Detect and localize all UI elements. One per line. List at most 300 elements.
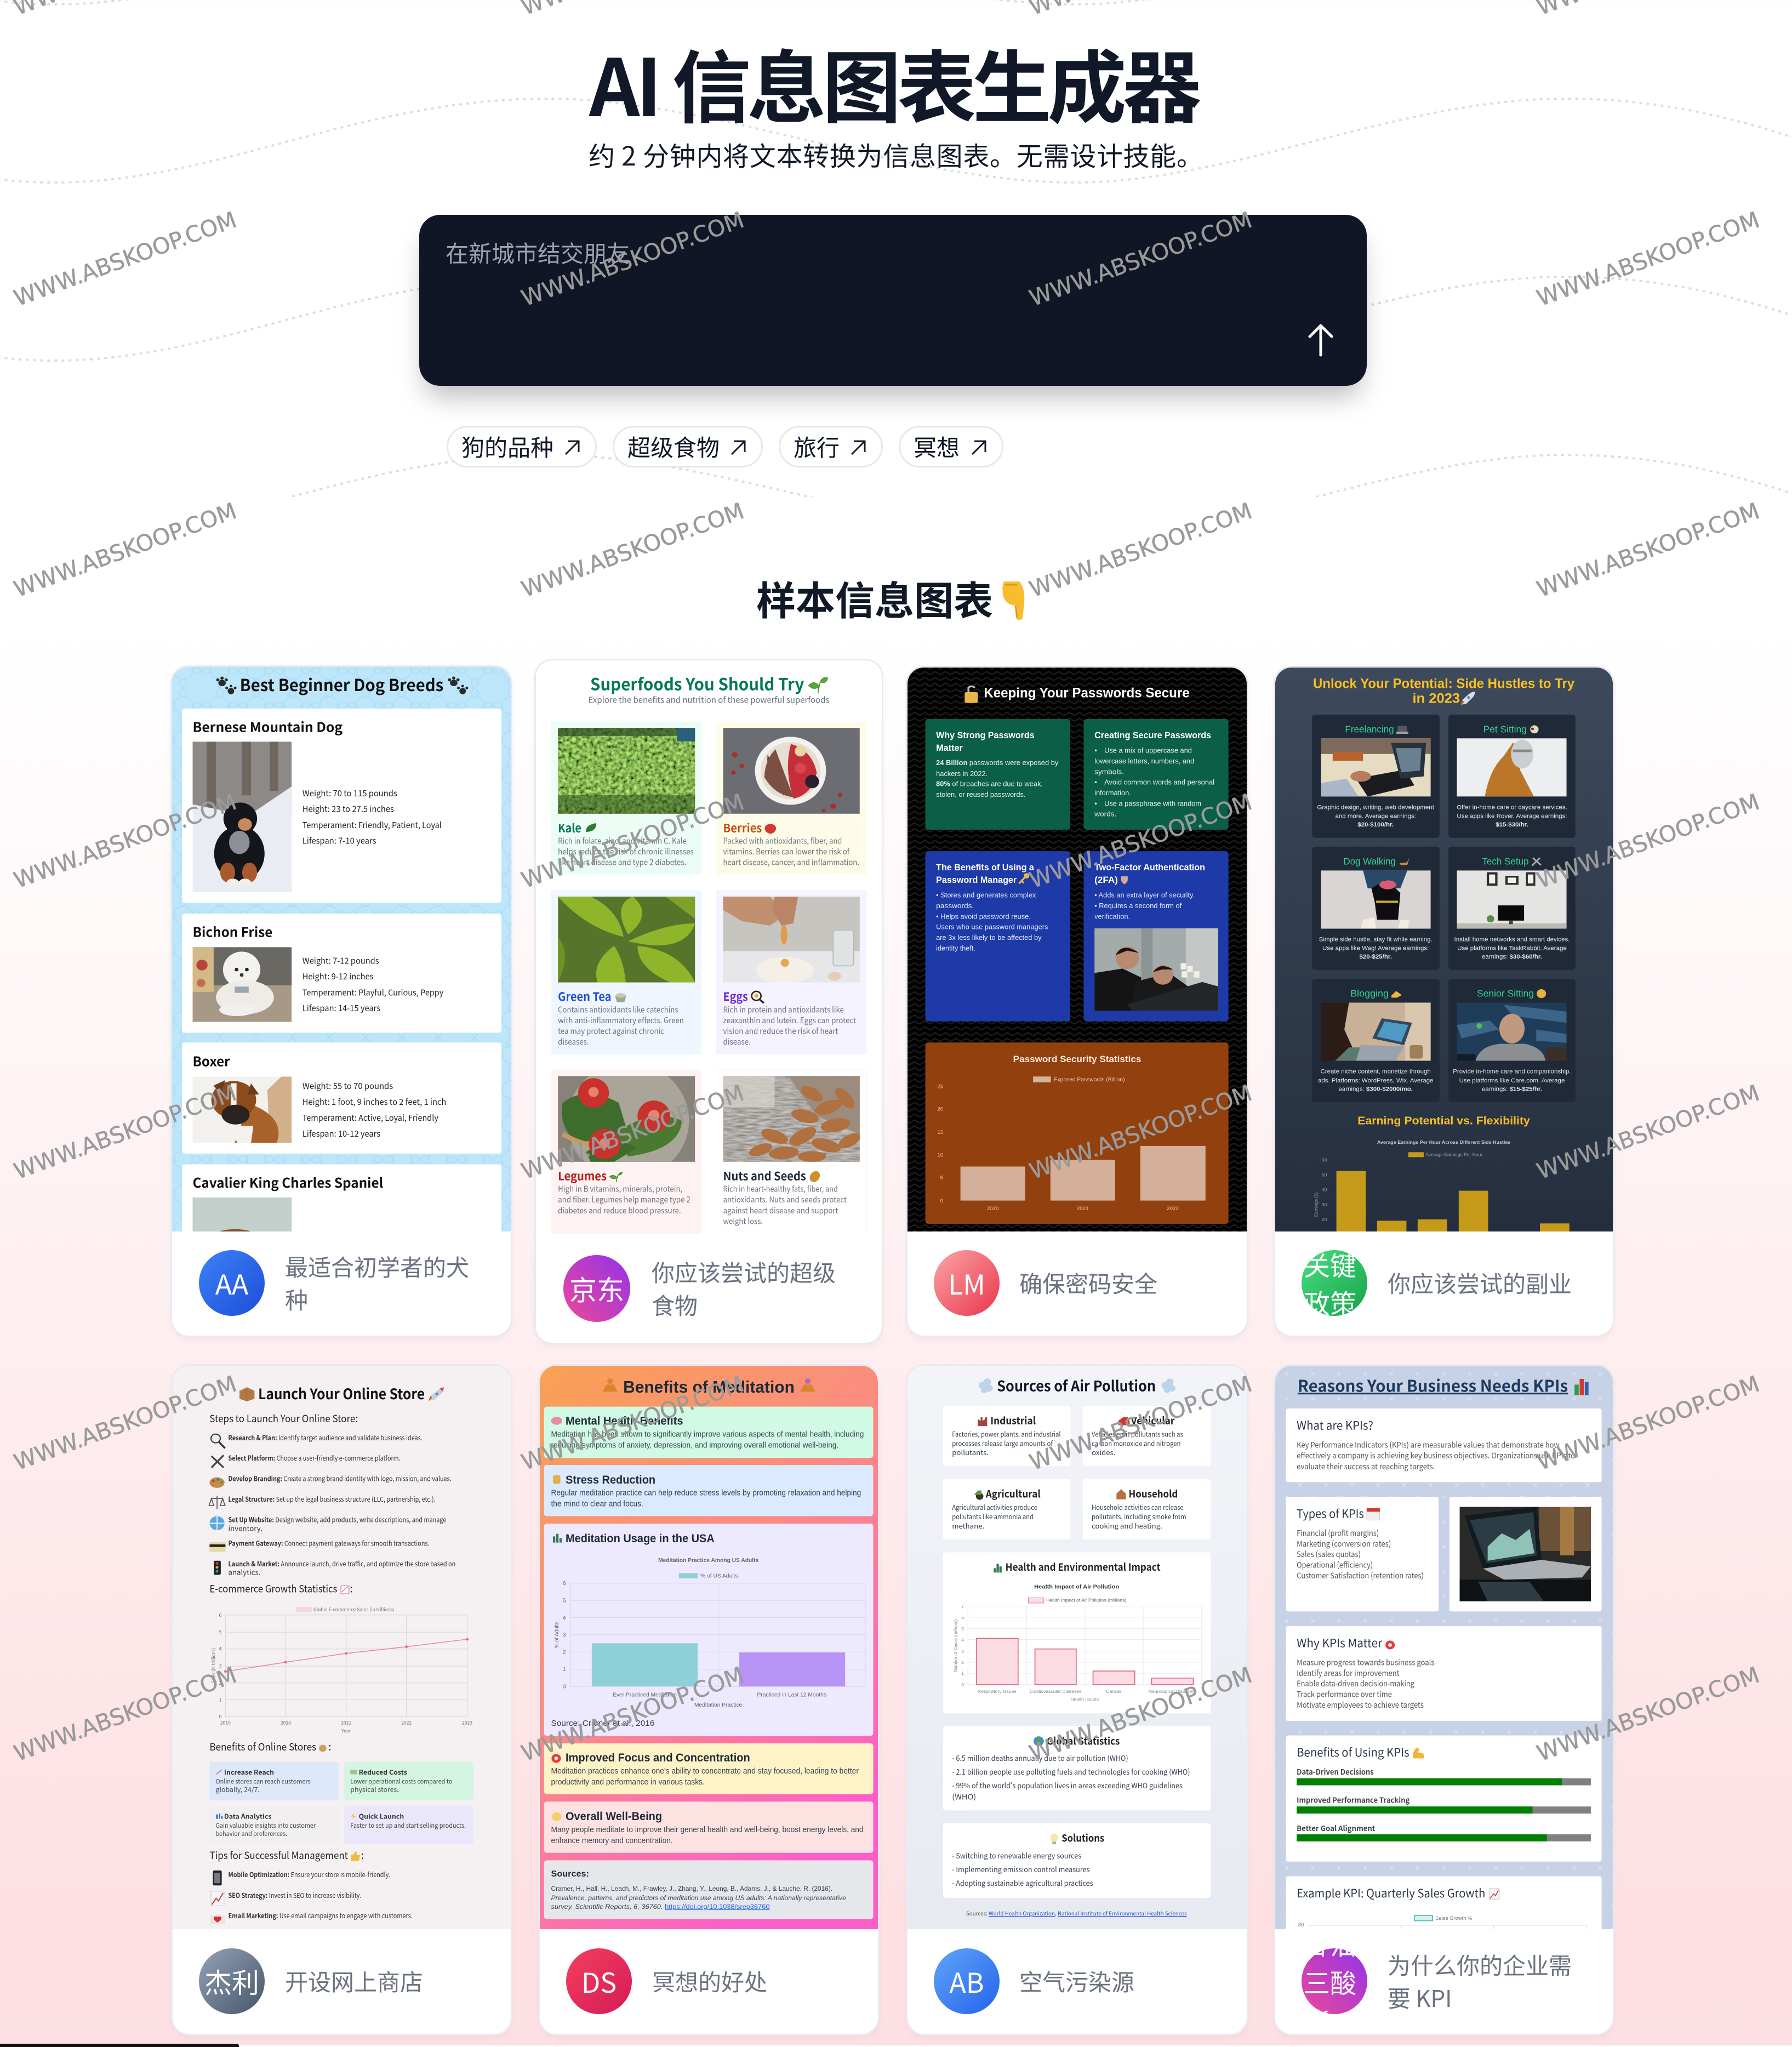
panel: stress reduction: the mind to clear and focus. xyxy=(551,1499,643,1509)
breed panel: Bernese Mountain Dog xyxy=(182,709,501,903)
panel: why strong passwords matter: hackers in 2022. xyxy=(936,769,988,778)
panel: types of KPIs xyxy=(1286,1497,1439,1611)
chart panel: meditation usage xyxy=(544,1524,873,1736)
watermarks: WWW.ABSKOOP.COM xyxy=(10,1080,240,1184)
chart: earning potential vs flexibility xyxy=(1313,1115,1570,1231)
avatar: DS: DS xyxy=(581,1961,617,2000)
avatar: triglyceride: 三酸 xyxy=(1304,1962,1356,2000)
food card: Eggs: zeaxanthin and lutein. Eggs can protect xyxy=(723,1014,856,1026)
benefits of online stores: : xyxy=(328,1740,332,1754)
caption: 空气污染源 xyxy=(1019,1964,1134,1997)
card: air pollution xyxy=(908,1366,1247,2034)
section heading: 样本信息图表 xyxy=(756,569,993,626)
benefits of online stores xyxy=(209,1740,473,1844)
prompt input panel xyxy=(419,215,1367,386)
source: Vehicular: oxides. xyxy=(1092,1447,1115,1457)
food card: Berries xyxy=(716,722,867,875)
card footer: dog breeds xyxy=(199,1250,469,1316)
watermarks: WWW.ABSKOOP.COM xyxy=(1533,1080,1763,1184)
hustle: Tech Setup: Tech Setup xyxy=(1482,856,1529,867)
heading: Sources of Air Pollution xyxy=(997,1374,1156,1395)
chart panel: meditation usage: Meditation Practice Among US Adults xyxy=(658,1558,759,1564)
avatar: 京东: 京东 xyxy=(569,1268,624,1308)
chart: health and environmental impact: Health Issues xyxy=(1070,1697,1099,1702)
panel: benefits progress bars: Data-Driven Decisions xyxy=(1297,1767,1374,1777)
hustle: Senior Sitting xyxy=(1448,979,1576,1102)
watermarks: WWW.ABSKOOP.COM xyxy=(1026,1080,1255,1184)
chip: dog breeds: 狗的品种 xyxy=(461,430,553,463)
panel: types of KPIs: Sales (sales quotas) xyxy=(1297,1549,1361,1560)
food card: Eggs: Rich in protein and antioxidants like xyxy=(723,1004,844,1015)
chart: e-commerce growth: Sales (in trillions) xyxy=(210,1648,217,1684)
food card: Kale: like heart disease and type 2 diabetes. xyxy=(558,857,686,868)
chart panel: meditation usage: 6 xyxy=(563,1581,566,1587)
hustle: Freelancing: and more. Average earnings: xyxy=(1335,813,1416,820)
placeholder text: 在新城市结交朋友 xyxy=(446,236,630,269)
chip: superfoods xyxy=(613,426,763,467)
chart: e-commerce growth: 3 xyxy=(219,1663,222,1669)
panel: stress reduction xyxy=(544,1465,873,1516)
chart: health and environmental impact: 6 xyxy=(961,1615,964,1620)
food card: Green Tea: Contains antioxidants like catechins xyxy=(558,1004,678,1015)
chart: health and environmental impact: Health Impact of Air Pollution xyxy=(1034,1584,1119,1590)
watermarks: WWW.ABSKOOP.COM xyxy=(518,1662,747,1766)
hustle: Freelancing: Freelancing xyxy=(1345,724,1394,734)
source: Household: pollutants, including smoke from xyxy=(1092,1511,1186,1521)
hustle: Dog Walking xyxy=(1312,847,1440,970)
benefits of online stores: Gain valuable insights into customer xyxy=(216,1821,316,1830)
chart: health and environmental impact: Health Impact of Air Pollution (millions) xyxy=(1046,1598,1127,1603)
global statistics: (WHO) xyxy=(952,1792,976,1802)
food card: Legumes: and fiber. Legumes help manage type 2 xyxy=(558,1194,690,1205)
breed panel: Cavalier King Charles Spaniel: Cavalier King Charles Spaniel xyxy=(193,1173,383,1192)
panel: improved focus: Improved Focus and Concentration xyxy=(566,1751,750,1764)
chart: health and environmental impact: 2 xyxy=(961,1660,964,1665)
chart panel: meditation usage: % of Adults xyxy=(554,1622,560,1648)
chart: earning potential vs flexibility: 30 xyxy=(1322,1202,1327,1207)
avatar: LM: LM xyxy=(948,1263,985,1303)
panel: why KPIs matter: Enable data-driven decision-making xyxy=(1297,1678,1414,1689)
watermarks: WWW.ABSKOOP.COM xyxy=(1026,789,1255,893)
panel: overall well-being: enhance memory and concentration. xyxy=(551,1836,673,1845)
food card: Green Tea: Green Tea xyxy=(558,988,611,1005)
food card: Nuts and Seeds: weight loss. xyxy=(723,1216,763,1227)
watermarks: WWW.ABSKOOP.COM xyxy=(518,1371,747,1475)
watermarks: WWW.ABSKOOP.COM xyxy=(1026,207,1255,311)
caption: 要 KPI xyxy=(1388,1981,1452,2014)
global statistics: Global Statistics xyxy=(1047,1733,1120,1748)
food card: Berries: Berries xyxy=(723,819,762,836)
chart: password security statistics: 15 xyxy=(937,1130,943,1136)
avatar: LM xyxy=(934,1250,1000,1316)
source: Industrial xyxy=(952,1413,1061,1457)
chart: earning potential vs flexibility: 40 xyxy=(1322,1187,1327,1192)
heading: Benefits of Meditation xyxy=(623,1377,795,1396)
avatar: DS xyxy=(566,1948,632,2014)
chart: health and environmental impact: 3 xyxy=(961,1649,964,1654)
hustle: Tech Setup: earnings: $30-$60/hr. xyxy=(1482,954,1542,960)
chart panel: meditation usage: 4 xyxy=(563,1615,566,1621)
tips for management: : xyxy=(361,1848,364,1862)
panel: improved focus: productivity and performance in various tasks. xyxy=(551,1777,705,1787)
chart: health and environmental impact: Number of Cases (millions) xyxy=(952,1619,958,1673)
caption xyxy=(285,1250,469,1316)
panel: types of KPIs: Marketing (conversion rates) xyxy=(1297,1538,1391,1549)
benefits of online stores: Increase Reach xyxy=(224,1768,274,1777)
watermarks: WWW.ABSKOOP.COM xyxy=(1533,1662,1763,1766)
chart panel: meditation usage: Practiced in Last 12 Months xyxy=(757,1692,826,1698)
panel: creating secure passwords: words. xyxy=(1094,810,1116,818)
chart: password security statistics: 2020 xyxy=(987,1206,999,1212)
caption xyxy=(1388,1948,1572,2014)
chart: password security statistics: Password Security Statistics xyxy=(1013,1054,1141,1064)
benefits of online stores: Reduced Costs xyxy=(359,1768,407,1777)
chart: health and environmental impact: Health and Environmental Impact xyxy=(1006,1559,1161,1574)
chart: password security statistics: 2021 xyxy=(1077,1206,1089,1212)
breed panel: Bernese Mountain Dog: Height: 23 to 27.5 inches xyxy=(303,803,394,814)
panel: password manager benefits: • Helps avoid password reuse. xyxy=(936,913,1031,920)
panel: example KPI chart: Example KPI: Quarterly Sales Growth xyxy=(1297,1885,1485,1901)
avatar: 杰利 xyxy=(199,1948,265,2014)
sources footer: Sources: World Health Organization, National Institute of Environmental Health Sciences xyxy=(966,1909,1187,1917)
chart: e-commerce growth: 5 xyxy=(219,1629,222,1635)
hustle: Dog Walking: $20-$25/hr. xyxy=(1359,954,1392,960)
chart: earning potential vs flexibility: 50 xyxy=(1322,1172,1327,1177)
source: Agricultural: pollutants like ammonia and xyxy=(952,1511,1034,1521)
food card: Kale: Kale xyxy=(558,819,581,836)
caption: 最适合初学者的犬 xyxy=(285,1250,469,1283)
food card: Kale: Rich in folate, zinc, and vitamin C. Kale xyxy=(558,835,687,846)
card: meditation xyxy=(540,1366,878,2034)
panel: improved focus xyxy=(544,1743,873,1794)
benefits of online stores: Data Analytics xyxy=(224,1812,272,1821)
benefits of online stores: physical stores. xyxy=(350,1785,399,1794)
panel: two-factor authentication: verification. xyxy=(1094,913,1130,920)
panel: creating secure passwords: information. xyxy=(1094,789,1131,797)
hustle: Dog Walking: Simple side hustle, stay fit while earning. xyxy=(1319,937,1433,943)
watermarks: WWW.ABSKOOP.COM xyxy=(10,1371,240,1475)
chart: health and environmental impact xyxy=(952,1559,1202,1702)
panel: why KPIs matter: Why KPIs Matter xyxy=(1297,1634,1383,1651)
panel: what are KPIs: evaluate their success at reaching targets. xyxy=(1297,1461,1435,1472)
decorative dotted waves xyxy=(0,0,1792,497)
breed panel: Bernese Mountain Dog: Temperament: Friendly, Patient, Loyal xyxy=(303,819,442,831)
panel: two-factor authentication: (2FA) xyxy=(1094,875,1118,885)
panel: creating secure passwords: • xyxy=(1094,746,1097,754)
chart: e-commerce growth: 2 xyxy=(219,1680,222,1686)
panel: why KPIs matter: Identify areas for improvement xyxy=(1297,1667,1400,1679)
panel: why KPIs matter: Measure progress towards business goals xyxy=(1297,1657,1435,1668)
chart panel: meditation usage: Meditation Usage in the USA xyxy=(566,1531,715,1545)
panel: dashboard photo xyxy=(1449,1497,1602,1611)
chart: health and environmental impact: Neurological Disorders xyxy=(1149,1689,1196,1694)
food card: Nuts and Seeds: against heart disease and support xyxy=(723,1205,838,1216)
panel: password manager benefits: are 3x less likely to be affected by xyxy=(936,933,1042,942)
panel: why strong passwords matter: stolen, or reused passwords. xyxy=(936,790,1025,799)
steps list xyxy=(209,1411,455,1577)
chart panel: meditation usage: Meditation Practice xyxy=(694,1702,743,1708)
breed panel: Boxer xyxy=(182,1042,501,1154)
hustle: Pet Sitting: $15-$30/hr. xyxy=(1496,822,1528,828)
hustle: Blogging: Create niche content, monetize through xyxy=(1321,1069,1431,1075)
panel: overall well-being: Overall Well-Being xyxy=(566,1810,662,1823)
caption: 为什么你的企业需 xyxy=(1388,1948,1572,1981)
food card: Berries: vitamins. Berries can lower the risk of xyxy=(723,846,850,857)
steps list: analytics. xyxy=(229,1567,260,1577)
food card: Eggs: Eggs xyxy=(723,988,748,1005)
chart: e-commerce growth xyxy=(209,1581,473,1734)
hustle: Pet Sitting: Pet Sitting xyxy=(1483,724,1527,734)
watermarks: WWW.ABSKOOP.COM xyxy=(10,498,240,602)
caption: 你应该尝试的超级 xyxy=(652,1255,836,1288)
chart: e-commerce growth: 1 xyxy=(219,1697,222,1703)
panel: two-factor authentication: Two-Factor Authentication xyxy=(1094,863,1205,873)
avatar: 京东 xyxy=(563,1255,630,1322)
chart: password security statistics: 20 xyxy=(937,1107,943,1112)
panel: example KPI chart: 30 xyxy=(1298,1922,1304,1928)
chart: health and environmental impact: 0 xyxy=(961,1682,964,1687)
benefits of online stores: globally, 24/7. xyxy=(216,1785,260,1794)
tips for management: Mobile Optimization: Ensure your store is mobile-friendly. xyxy=(229,1869,390,1879)
solutions: - Implementing emission control measures xyxy=(952,1864,1090,1875)
breed panel: Cavalier King Charles Spaniel xyxy=(182,1164,501,1240)
hustle: Dog Walking: Use apps like Wag! Average earnings: xyxy=(1322,945,1429,952)
chart: health and environmental impact: Cancer xyxy=(1106,1689,1121,1694)
avatar: 杰利: 杰利 xyxy=(204,1961,259,2000)
chip: travel: 旅行 xyxy=(794,430,840,463)
panel: mental health benefits: Mental Health Benefits xyxy=(566,1414,683,1428)
avatar: policy xyxy=(1302,1250,1367,1316)
breed panel: Bichon Frise xyxy=(182,914,501,1033)
chart: health and environmental impact: 7 xyxy=(961,1604,964,1609)
panel: what are KPIs: What are KPIs? xyxy=(1297,1417,1373,1433)
benefits of online stores: Lower operational costs compared to xyxy=(350,1777,452,1786)
chip: dog breeds xyxy=(447,426,597,467)
breed panel: Boxer: Temperament: Active, Loyal, Friendly xyxy=(303,1112,438,1124)
chart: password security statistics: Exposed Passwords (Billion) xyxy=(1054,1077,1125,1083)
panel: password manager benefits: Password Manager xyxy=(936,875,1017,885)
solutions xyxy=(952,1830,1104,1889)
chart: e-commerce growth: Year xyxy=(341,1727,351,1734)
infographic thumbnail: air pollution xyxy=(908,1365,1247,1929)
panel: why KPIs matter xyxy=(1286,1626,1602,1721)
chart panel: meditation usage: 1 xyxy=(563,1667,566,1673)
watermarks: WWW.ABSKOOP.COM xyxy=(518,207,747,311)
watermarks: WWW.ABSKOOP.COM xyxy=(10,1662,240,1766)
benefits of online stores: Online stores can reach customers xyxy=(216,1777,311,1786)
panel: types of KPIs: Financial (profit margins) xyxy=(1297,1527,1379,1538)
benefits of online stores: Faster to set up and start selling products. xyxy=(350,1821,466,1830)
steps list: Set Up Website: Design website, add products, write descriptions, and manage xyxy=(229,1514,446,1525)
source: Industrial: pollutants. xyxy=(952,1447,989,1457)
global statistics: - 2.1 billion people use polluting fuels and technologies for cooking (WHO) xyxy=(952,1767,1190,1777)
panel: password manager benefits: Users who use password managers xyxy=(936,923,1048,931)
source: Agricultural: Agricultural activities produce xyxy=(952,1502,1037,1512)
breed panel: Bichon Frise: Temperament: Playful, Curious, Peppy xyxy=(303,987,443,998)
chart: earning potential vs flexibility: Earnings ($) xyxy=(1313,1193,1319,1217)
chart: e-commerce growth: 6 xyxy=(219,1612,222,1618)
hustle: Blogging: Blogging xyxy=(1350,988,1389,999)
tips for management: SEO Strategy: Invest in SEO to increase visibility. xyxy=(229,1890,361,1900)
source: Industrial: Factories, power plants, and industrial xyxy=(952,1429,1061,1439)
panel: types of KPIs: Operational (efficiency) xyxy=(1297,1559,1373,1570)
panel: creating secure passwords: Creating Secure Passwords xyxy=(1094,730,1211,740)
chart: e-commerce growth: 2022 xyxy=(401,1720,412,1726)
chart panel: meditation usage: Ever Practiced Meditation xyxy=(613,1692,677,1698)
food card: Nuts and Seeds: antioxidants. Nuts and seeds protect xyxy=(723,1194,847,1205)
chart: password security statistics: 5 xyxy=(940,1175,943,1181)
chart: earning potential vs flexibility: 60 xyxy=(1322,1158,1327,1162)
subtitle: 约 2 分钟内将文本转换为信息图表。无需设计技能。 xyxy=(589,135,1203,173)
panel: why strong passwords matter: 80% of breaches are due to weak, xyxy=(936,780,1043,788)
solutions: Solutions xyxy=(1061,1830,1104,1845)
infographic thumbnail: meditation xyxy=(540,1365,878,1929)
panel: creating secure passwords: • xyxy=(1094,778,1097,786)
panel: password manager benefits: identity theft. xyxy=(936,944,975,952)
chart panel: meditation usage: 3 xyxy=(563,1632,566,1638)
source: Household: Household xyxy=(1129,1486,1178,1501)
card footer: air pollution xyxy=(908,1928,1247,2034)
solutions: - Adopting sustainable agricultural practices xyxy=(952,1878,1093,1889)
chart panel: meditation usage: 2 xyxy=(563,1650,566,1655)
panel: sources: survey. Scientific Reports, 6, 36760. https://doi.org/10.1038/srep36760 xyxy=(551,1903,770,1911)
panel: why strong passwords matter xyxy=(925,719,1070,830)
panel: two-factor authentication xyxy=(1083,851,1229,1022)
infographic thumbnail: dog breeds xyxy=(172,667,511,1231)
food card: Eggs: disease. xyxy=(723,1036,751,1047)
card: KPIs xyxy=(1275,1366,1613,2034)
steps list: Launch & Market: Announce launch, drive traffic, and optimize the store based on xyxy=(229,1559,455,1569)
global statistics: - 99% of the world's population lives in areas exceeding WHO guidelines xyxy=(952,1781,1183,1791)
heading: Launch Your Online Store xyxy=(258,1382,425,1404)
breed panel: Boxer: Boxer xyxy=(193,1051,230,1070)
watermarks: WWW.ABSKOOP.COM xyxy=(1533,789,1763,893)
heading: Best Beginner Dog Breeds xyxy=(240,672,443,696)
heading xyxy=(589,671,829,705)
source: Agricultural: Agricultural xyxy=(985,1486,1041,1501)
chart panel: meditation usage: Source: Cramer et al., 2016 xyxy=(551,1719,654,1728)
steps list: inventory. xyxy=(229,1523,262,1533)
chart: health and environmental impact: Respiratory Issues xyxy=(978,1689,1017,1694)
food card: Green Tea: tea may protect against chronic xyxy=(558,1025,664,1036)
steps list: Steps to Launch Your Online Store: xyxy=(209,1411,358,1426)
panel: sources xyxy=(544,1860,873,1919)
food card: Eggs xyxy=(716,890,867,1054)
title: AI 信息图表生成器 xyxy=(589,25,1198,139)
panel: creating secure passwords: Use a mix of uppercase and xyxy=(1104,746,1192,754)
watermarks: WWW.ABSKOOP.COM xyxy=(10,207,240,311)
chart: health and environmental impact: 1 xyxy=(961,1670,964,1676)
source: Vehicular xyxy=(1092,1413,1183,1457)
avatar: AA xyxy=(199,1250,265,1316)
watermarks: WWW.ABSKOOP.COM xyxy=(1533,1371,1763,1475)
chart panel: meditation usage: 5 xyxy=(563,1598,566,1604)
steps list: Payment Gateway: Connect payment gateways for smooth transactions. xyxy=(229,1538,430,1548)
food card: Nuts and Seeds: Nuts and Seeds xyxy=(723,1167,806,1184)
chart: e-commerce growth: E-commerce Growth Statistics xyxy=(209,1581,337,1595)
chart: e-commerce growth: : xyxy=(350,1581,353,1595)
icon: pointing down hand xyxy=(1002,581,1025,620)
card: passwords xyxy=(908,668,1247,1336)
panel: creating secure passwords xyxy=(1083,719,1229,830)
panel: benefits progress bars: Benefits of Using KPIs xyxy=(1297,1744,1409,1760)
chip: superfoods: 超级食物 xyxy=(627,430,720,463)
chart: e-commerce growth: 0 xyxy=(219,1713,222,1720)
food card: Green Tea: diseases. xyxy=(558,1036,589,1047)
heading: in 2023 xyxy=(1412,691,1460,706)
hustle: Dog Walking: Dog Walking xyxy=(1343,856,1396,867)
chart: e-commerce growth: Global E-commerce Sales (in trillions) xyxy=(313,1606,395,1612)
chart: health and environmental impact: 4 xyxy=(961,1637,964,1643)
card footer: passwords xyxy=(934,1250,1157,1316)
food card: Eggs: vision and reduce the risk of heart xyxy=(723,1025,838,1036)
panel: why KPIs matter: Track performance over time xyxy=(1297,1689,1392,1700)
breed panel: Bernese Mountain Dog: Weight: 70 to 115 pounds xyxy=(303,787,397,799)
avatar: AB: AB xyxy=(949,1961,984,2000)
steps list: Legal Structure: Set up the legal business structure (LLC, partnership, etc.). xyxy=(229,1493,436,1504)
panel: creating secure passwords: Avoid common words and personal xyxy=(1104,778,1214,786)
source: Vehicular: Vehicles emit pollutants such as xyxy=(1092,1429,1183,1439)
heading: Keeping Your Passwords Secure xyxy=(984,686,1190,701)
chart: e-commerce growth: 4 xyxy=(219,1645,222,1652)
hustle: Freelancing xyxy=(1312,715,1440,838)
chart panel: meditation usage: % of US Adults xyxy=(700,1573,738,1579)
caption: 冥想的好处 xyxy=(652,1964,767,1997)
panel: password manager benefits: The Benefits of Using a xyxy=(936,863,1035,873)
hustle: Tech Setup: Use platforms like TaskRabbit. Average xyxy=(1457,945,1567,952)
hustle: Pet Sitting xyxy=(1448,715,1576,838)
panel: why strong passwords matter: Why Strong Passwords xyxy=(936,730,1035,740)
food card: Green Tea: with anti-inflammatory effects. Green xyxy=(558,1014,684,1026)
panel: what are KPIs xyxy=(1286,1409,1602,1482)
food card: Berries: heart disease, cancer, and inflammation. xyxy=(723,857,859,868)
food card: Kale: helps reduce the risk of chronic illnesses xyxy=(558,846,694,857)
hustle: Senior Sitting: earnings: $15-$25/hr. xyxy=(1482,1086,1542,1092)
panel: why KPIs matter: Motivate employees to achieve targets xyxy=(1297,1699,1424,1710)
source: Agricultural: methane. xyxy=(952,1520,984,1531)
source: Household: Household activities can release xyxy=(1092,1502,1184,1512)
watermarks: WWW.ABSKOOP.COM xyxy=(1026,498,1255,602)
panel: benefits progress bars: Better Goal Alignment xyxy=(1297,1823,1375,1834)
caption: 你应该尝试的副业 xyxy=(1388,1266,1572,1299)
breed panel: Bichon Frise: Weight: 7-12 pounds xyxy=(303,955,379,966)
breed panel: Boxer: Weight: 55 to 70 pounds xyxy=(303,1080,393,1092)
panel: password manager benefits xyxy=(925,851,1070,1022)
steps list: Develop Branding: Create a strong brand identity with logo, mission, and values. xyxy=(229,1473,452,1484)
food card: Kale xyxy=(551,722,701,875)
hustle: Blogging: ads. Platforms: WordPress, Wix. Average xyxy=(1318,1077,1433,1084)
avatar: AA: AA xyxy=(215,1263,248,1303)
heading: Superfoods You Should Try xyxy=(590,671,804,695)
heading: Explore the benefits and nutrition of these powerful superfoods xyxy=(589,694,829,705)
chart: e-commerce growth: 2020 xyxy=(281,1720,291,1726)
panel: example KPI chart xyxy=(1286,1876,1602,1938)
hustle: Pet Sitting: Offer in-home care or daycare services. xyxy=(1457,804,1567,811)
food card: Legumes: diabetes and reduce blood pressure. xyxy=(558,1205,681,1216)
panel: creating secure passwords: Use a passphrase with random xyxy=(1104,800,1201,807)
caption: 种 xyxy=(285,1282,308,1316)
panel: example KPI chart: Sales Growth % xyxy=(1435,1915,1472,1921)
card footer: KPIs xyxy=(1275,1928,1613,2034)
panel: why strong passwords matter: Matter xyxy=(936,743,963,753)
avatar: triglyceride xyxy=(1302,1948,1367,2014)
watermarks: WWW.ABSKOOP.COM xyxy=(10,789,240,893)
breed panel: Bichon Frise: Bichon Frise xyxy=(193,922,272,941)
tips for management: Email Marketing: Use email campaigns to engage with customers. xyxy=(229,1910,413,1920)
panel: what are KPIs: Key Performance Indicators (KPIs) are measurable values that demonstrate how xyxy=(1297,1439,1560,1450)
tips for management: Tips for Successful Management xyxy=(209,1848,348,1862)
infographic thumbnail: passwords xyxy=(908,668,1247,1231)
